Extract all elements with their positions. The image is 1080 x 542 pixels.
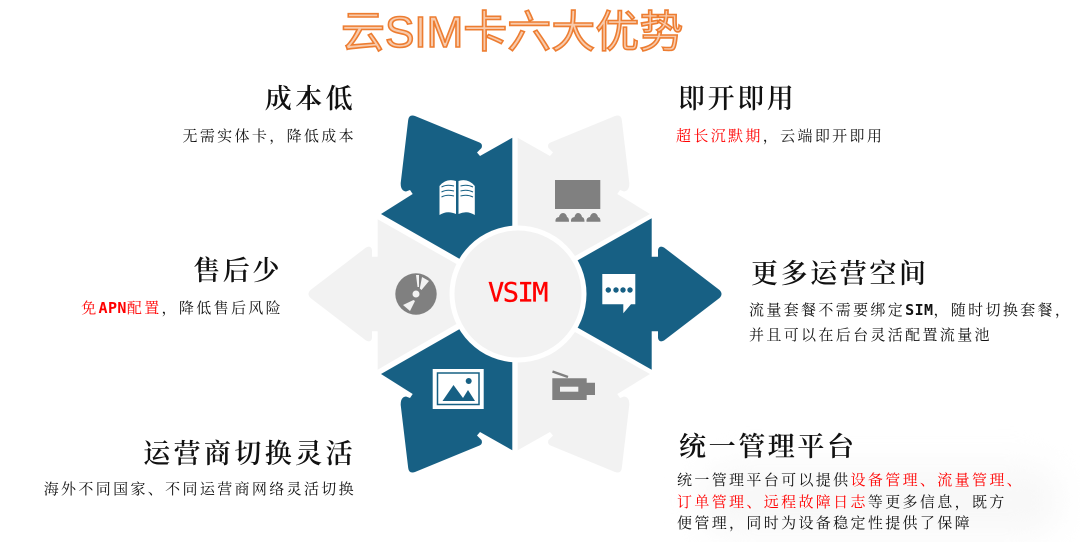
heading: 即开即用: 即开即用 xyxy=(678,84,796,114)
icon: picture frame xyxy=(433,369,484,409)
text: 即开即用 description: 超长沉默期，云端即开即用 xyxy=(676,129,884,145)
watermark glow xyxy=(700,465,1060,535)
panel: top-left arrow segment xyxy=(381,116,512,294)
icon: presentation screen and audience xyxy=(555,180,600,222)
text: 更多运营空间 description xyxy=(749,301,1072,344)
text: 售后少 description: 免APN配置，降低售后风险 xyxy=(81,299,283,317)
panel: right arrow segment xyxy=(518,218,722,370)
icon: open book xyxy=(440,180,475,215)
panel: top-right arrow segment xyxy=(518,116,650,294)
panel: bottom-left arrow segment xyxy=(381,294,512,472)
text: 更多运营空间 description: 流量套餐不需要绑定SIM，随时切换套餐， xyxy=(749,301,1072,319)
text: 更多运营空间 description: 并且可以在后台灵活配置流量池 xyxy=(749,328,992,344)
text: 统一管理平台 description: 统一管理平台可以提供设备管理、流量管理、 xyxy=(677,473,1024,489)
text: 成本低 description: 无需实体卡，降低成本 xyxy=(182,129,356,145)
panel: left arrow segment xyxy=(308,219,518,370)
icon: video camera xyxy=(552,372,595,400)
text: 统一管理平台 description xyxy=(677,472,1024,532)
heading: 运营商切换灵活: 运营商切换灵活 xyxy=(143,439,356,469)
center circle xyxy=(450,226,586,362)
heading: 统一管理平台: 统一管理平台 xyxy=(679,432,857,462)
text: 运营商切换灵活 description: 海外不同国家、不同运营商网络灵活切换 xyxy=(44,482,356,498)
icon: compact disc xyxy=(395,273,437,315)
panel: bottom-right arrow segment xyxy=(518,294,650,472)
heading: 售后少: 售后少 xyxy=(193,256,282,286)
text: 统一管理平台 description: 订单管理、远程故障日志等更多信息，既方 xyxy=(677,494,1007,510)
text: 统一管理平台 description: 便管理，同时为设备稳定性提供了保障 xyxy=(677,516,972,532)
center circle: VSIM xyxy=(488,278,548,308)
heading: 更多运营空间: 更多运营空间 xyxy=(751,259,929,289)
icon: speech bubble xyxy=(602,274,635,313)
heading: 成本低: 成本低 xyxy=(265,84,356,114)
title: 云SIM卡六大优势 xyxy=(341,8,683,57)
